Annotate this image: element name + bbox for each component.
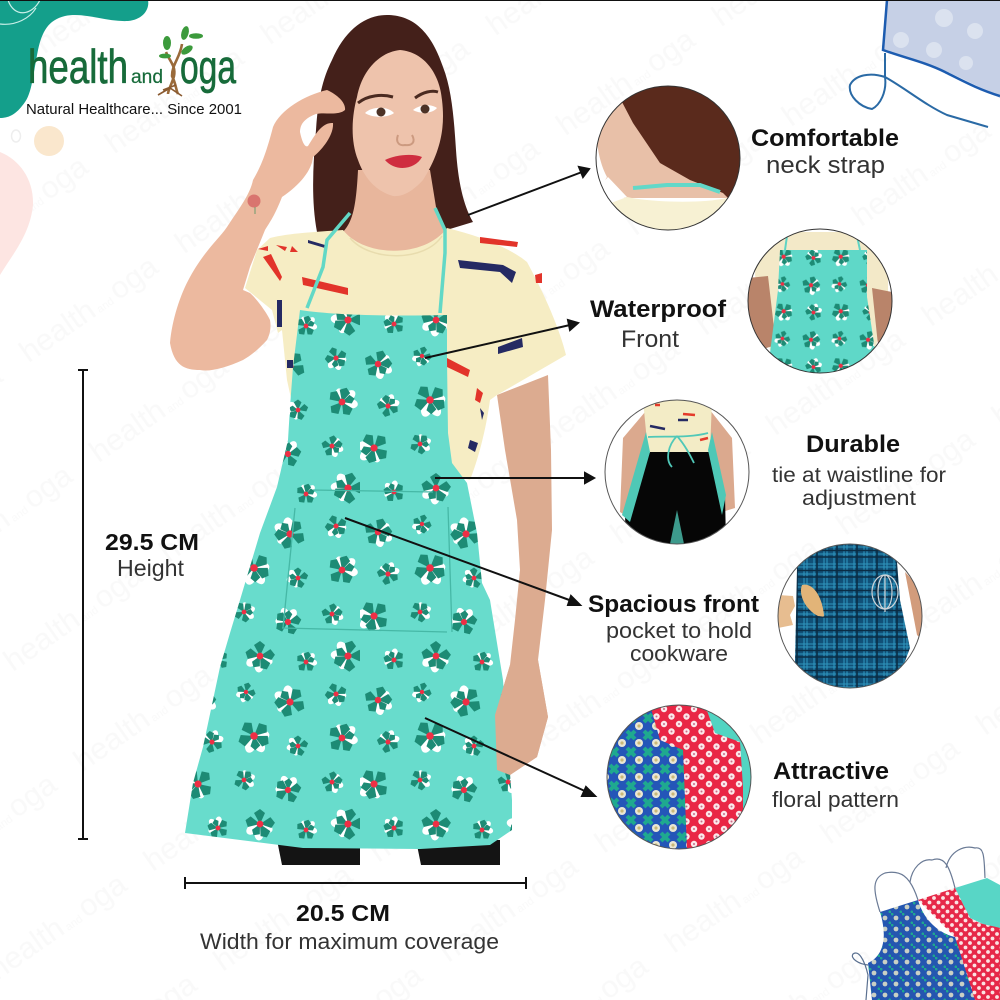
label: comfortable neck strap: Comfortable [751,125,899,152]
label: spacious front: Spacious front [588,591,759,618]
label: attractive: floral pattern [772,787,899,812]
width dimension line [185,877,526,889]
label: durable: Durable [806,431,900,458]
label: spacious front [588,591,759,666]
label: comfortable neck strap [751,125,899,179]
width label: 20.5 CM [296,900,390,926]
collar line [350,236,442,256]
black trousers [277,840,500,865]
neck [343,170,447,262]
circle: neck strap detail [598,86,740,230]
height label: Height [117,555,185,581]
circle: durable tie detail [620,400,735,544]
label: waterproof front [590,296,727,353]
decorative circles [12,126,64,156]
lowered arm [495,375,552,775]
decorative pink blob [0,152,33,275]
arrows [345,167,595,796]
teal apron [955,878,1000,932]
circle outline [778,544,922,688]
logo wordmark [28,40,237,93]
raised arm [170,90,345,371]
hair [313,15,473,235]
arrow: pattern [425,718,595,796]
arrow: durable tie [435,473,594,483]
apron straps [875,847,985,912]
arrow: pocket [345,518,580,605]
label: attractive: Attractive [773,758,889,785]
image border [0,0,1000,2]
width label: Width for maximum coverage [200,929,499,954]
whisk [872,575,898,612]
label: durable: adjustment [802,487,916,510]
decorative teal blob [0,0,148,118]
height dimension line [78,370,88,839]
face [353,50,443,196]
blue apron [868,900,975,1000]
t-shirt [245,228,566,480]
icon: tree [158,25,203,96]
label: durable: tie at waistline for [772,464,946,487]
facial features [358,91,438,168]
tattoo [248,194,260,214]
label: waterproof front: Waterproof [590,296,727,323]
logo tagline: Natural Healthcare... Since 2001 [26,101,242,118]
label: waterproof front: Front [621,326,679,353]
width label [200,900,499,954]
label: spacious front: cookware [630,641,728,666]
neck strap [307,208,445,313]
top-right apron fabric [850,0,1000,127]
bottom-right aprons [852,847,1000,1000]
circle outline [748,229,892,373]
logo [26,25,242,118]
circle: waterproof front detail [748,229,892,373]
height label [105,529,199,581]
label: attractive [772,758,899,812]
arrow: waterproof front [425,320,578,358]
circle: floral pattern detail [607,705,751,849]
hand over apron [495,660,548,775]
model [170,15,566,865]
red apron [918,888,1000,1000]
logo wordmark: and [131,67,163,88]
label: comfortable neck strap: neck strap [766,152,885,179]
apron [185,310,512,849]
t-shirt stripes [258,237,542,452]
label: spacious front: pocket to hold [606,618,752,643]
label: durable [772,431,946,510]
circle outline [605,400,749,544]
arrow: neck strap [468,167,589,215]
apron pocket seam [282,490,452,632]
circle: pocket detail [778,544,922,688]
small tie loop [852,953,868,1000]
circle outline [607,705,751,849]
logo wordmark: health [28,40,128,93]
circle outline [596,86,740,230]
logo wordmark: oga [180,40,237,93]
height label: 29.5 CM [105,529,199,555]
